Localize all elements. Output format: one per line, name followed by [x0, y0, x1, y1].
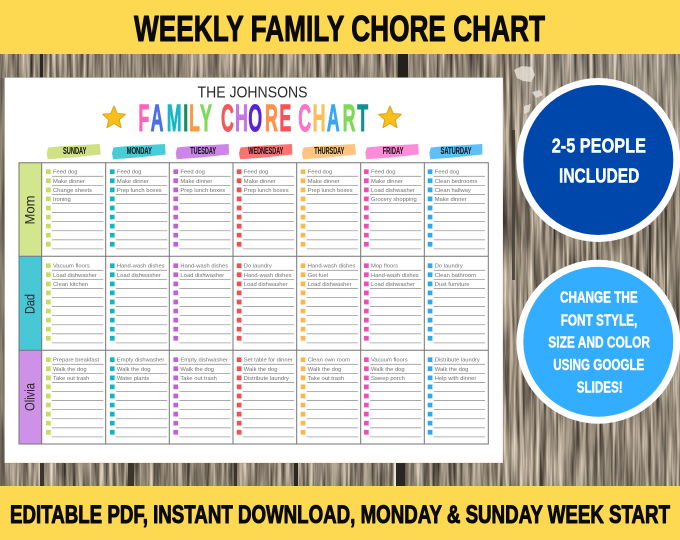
- cell: Olivia Monday: [112, 357, 164, 438]
- day headers: SATURDAY: [440, 146, 472, 157]
- name cell: Mom: [19, 163, 42, 256]
- cell: Olivia Monday: Empty dishwasher: [117, 358, 164, 364]
- cell: Dad Wednesday: [239, 263, 292, 344]
- callout: customise in Google Slides: USING GOOGLE: [553, 357, 644, 374]
- cell: Dad Friday: [366, 263, 419, 344]
- cell: Olivia Sunday: [48, 357, 99, 438]
- name cell: Dad: Dad: [22, 294, 38, 314]
- cell: Mom Saturday: Make dinner: [435, 197, 467, 203]
- cell: Olivia Saturday: Distribute laundry: [435, 358, 480, 364]
- cell: Mom Wednesday: Feed dog: [244, 170, 268, 176]
- cell: Mom Thursday: Prep lunch boxes: [308, 188, 353, 194]
- top banner: [0, 0, 680, 54]
- day headers: TUESDAY: [190, 146, 216, 157]
- cell: Dad Tuesday: [176, 263, 228, 344]
- callout: customise in Google Slides: SIZE AND COLOR: [548, 335, 650, 352]
- cell: Olivia Tuesday: Take out trash: [180, 376, 217, 382]
- cell: Olivia Tuesday: Empty dishwasher: [180, 358, 228, 364]
- cell: Olivia Wednesday: Walk the dog: [244, 367, 277, 373]
- cell: Olivia Sunday: Take out trash: [53, 376, 89, 382]
- cell: Olivia Friday: Sweep porch: [371, 376, 405, 382]
- cell: Olivia Sunday: Prepare breakfast: [53, 358, 99, 364]
- grid lines: [19, 163, 488, 444]
- cell: Mom Friday: [366, 169, 417, 250]
- cell: Olivia Thursday: Take out trash: [308, 376, 344, 382]
- cell: Dad Sunday: Load dishwasher: [53, 273, 97, 279]
- bottom banner: [0, 486, 680, 540]
- cell: Dad Wednesday: Do laundry: [244, 264, 272, 270]
- cell: Mom Wednesday: [239, 169, 289, 250]
- icon: right star: [379, 106, 401, 128]
- cell: Olivia Saturday: Walk the dog: [435, 367, 468, 373]
- cell: Mom Sunday: Change sheets: [53, 188, 92, 194]
- cell: Dad Friday: Mop floors: [371, 264, 398, 270]
- cell: Dad Sunday: [48, 263, 97, 344]
- cell: Mom Tuesday: Prep lunch boxes: [180, 188, 225, 194]
- name cell: Dad: [19, 256, 42, 350]
- cell: Dad Saturday: Dust furniture: [435, 282, 469, 288]
- cell: Olivia Tuesday: Walk the dog: [180, 367, 214, 373]
- cell: Dad Monday: [112, 263, 165, 344]
- cell: Mom Monday: [112, 169, 162, 250]
- panel: chore chart sheet: [4, 78, 503, 463]
- cell: Dad Saturday: Clean bathroom: [435, 273, 476, 279]
- cell: Mom Friday: Grocery shopping: [371, 197, 417, 203]
- cell: Olivia Friday: Walk the dog: [371, 367, 405, 373]
- cell: Mom Saturday: Clean bedrooms: [435, 179, 477, 185]
- cell: Mom Monday: Prep lunch boxes: [117, 188, 162, 194]
- cell: Dad Wednesday: Hand-wash dishes: [244, 273, 292, 279]
- cell: Mom Saturday: [430, 169, 477, 250]
- cell: Dad Thursday: Hand-wash dishes: [308, 264, 355, 270]
- callout: people included: INCLUDED: [559, 166, 639, 188]
- cell: Olivia Friday: [366, 357, 408, 438]
- cell: Olivia Wednesday: Distribute laundry: [244, 376, 289, 382]
- callout: people included: [516, 78, 680, 242]
- cell: Dad Wednesday: Load dishwasher: [244, 282, 288, 288]
- cell: Dad Sunday: Vacuum floors: [53, 264, 90, 270]
- cell: Mom Friday: Feed dog: [371, 170, 396, 176]
- chart title: FAMILYCHORECHART: [138, 98, 368, 140]
- wood background: [0, 54, 680, 486]
- cell: Mom Tuesday: Make dinner: [180, 179, 212, 185]
- cell: Dad Friday: Load dishwasher: [371, 282, 415, 288]
- cell: Olivia Thursday: Clean own room: [308, 358, 350, 364]
- day headers: THURSDAY: [314, 146, 344, 157]
- cell: Olivia Thursday: Walk the dog: [308, 367, 341, 373]
- day headers: WEDNESDAY: [248, 146, 283, 157]
- cell: Olivia Thursday: [303, 357, 350, 438]
- cell: Mom Sunday: [48, 169, 92, 250]
- cell: Dad Monday: Load dishwasher: [117, 273, 161, 279]
- cell: Mom Sunday: Make dinner: [53, 179, 85, 185]
- cell: Dad Monday: Hand-wash dishes: [117, 264, 165, 270]
- cell: Mom Thursday: [303, 169, 353, 250]
- cell: Olivia Wednesday: Set table for dinner: [244, 358, 293, 364]
- callout: customise in Google Slides: SLIDES!: [577, 380, 623, 396]
- cell: Mom Wednesday: Make dinner: [244, 179, 276, 185]
- callout: customise in Google Slides: CHANGE THE: [560, 290, 638, 307]
- cell: Mom Wednesday: Prep lunch boxes: [244, 188, 289, 194]
- cell: Mom Thursday: Feed dog: [308, 170, 332, 176]
- name cell: Olivia: [19, 350, 42, 444]
- cell: Olivia Wednesday: [239, 357, 293, 438]
- cell: Mom Monday: Feed dog: [117, 170, 141, 176]
- cell: Mom Saturday: Clean hallway: [435, 188, 471, 194]
- cell: Olivia Monday: Water plants: [117, 376, 149, 382]
- cell: Olivia Sunday: Walk the dog: [53, 367, 87, 373]
- cell: Olivia Saturday: Help with dinner: [435, 376, 476, 382]
- cell: Dad Friday: Hand-wash dishes: [371, 273, 419, 279]
- cell: Mom Sunday: Ironing: [53, 197, 71, 203]
- cell: Olivia Monday: Walk the dog: [117, 367, 151, 373]
- cell: Dad Thursday: Load dishwasher: [308, 282, 352, 288]
- cell: Dad Saturday: Do laundry: [435, 264, 463, 270]
- cell: Mom Monday: Make dinner: [117, 179, 149, 185]
- callout: customise in Google Slides: [516, 260, 680, 424]
- cell: Mom Saturday: Feed dog: [435, 170, 459, 176]
- callout: customise in Google Slides: FONT STYLE,: [561, 312, 637, 330]
- icon: left star: [103, 106, 125, 128]
- cell: Dad Tuesday: Load dishwasher: [180, 273, 224, 279]
- day headers: [47, 144, 482, 159]
- day headers: FRIDAY: [383, 146, 404, 157]
- cell: Mom Friday: Load dishwasher: [371, 188, 415, 194]
- family name: THE JOHNSONS: [198, 84, 308, 102]
- cell: Mom Thursday: Make dinner: [308, 179, 340, 185]
- cell: Dad Thursday: [303, 263, 355, 344]
- cell: Mom Friday: Make dinner: [371, 179, 403, 185]
- day headers: SUNDAY: [63, 146, 87, 157]
- cell: Mom Tuesday: [176, 169, 225, 250]
- cell: Dad Saturday: [430, 263, 476, 344]
- callout: people included: 2-5 PEOPLE: [552, 136, 646, 158]
- name cell: Olivia: Olivia: [22, 383, 38, 411]
- cell: Dad Tuesday: Hand-wash dishes: [180, 264, 228, 270]
- name cell: Mom: Mom: [22, 196, 38, 224]
- cell: Dad Sunday: Clean kitchen: [53, 282, 88, 288]
- cell: Olivia Tuesday: [176, 357, 228, 438]
- cell: Mom Tuesday: Feed dog: [180, 170, 205, 176]
- cell: Mom Sunday: Feed dog: [53, 170, 78, 176]
- day headers: MONDAY: [127, 146, 152, 157]
- cell: Olivia Friday: Vacuum floors: [371, 358, 408, 364]
- cell: Dad Thursday: Get fuel: [308, 273, 328, 279]
- cell: Olivia Saturday: [430, 357, 480, 438]
